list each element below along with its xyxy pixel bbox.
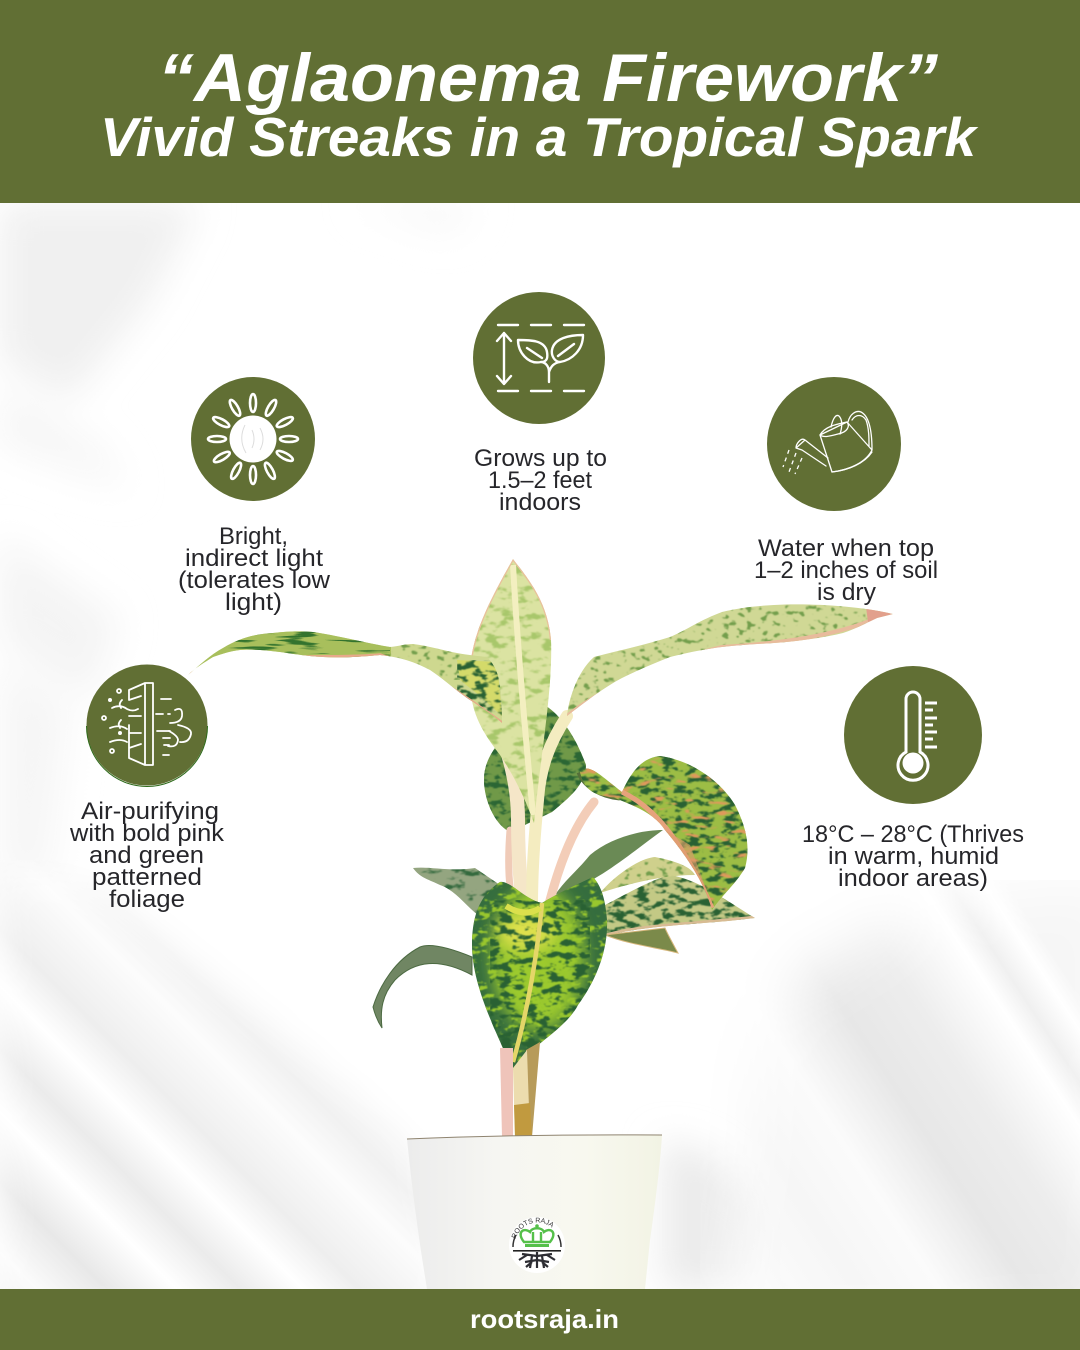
leaf: lower left drooping: [373, 946, 472, 1028]
text: air purifying: [69, 798, 225, 913]
icon: sun: [191, 377, 315, 501]
header band: [0, 0, 1080, 203]
icon: air purifier: [86, 664, 208, 786]
text: light: (tolerates low: [178, 567, 331, 594]
text: light: [178, 523, 331, 616]
icon: watering can: [767, 377, 901, 511]
text: water: is dry: [817, 579, 876, 606]
text: temperature: [802, 821, 1024, 892]
leaf: long right: [567, 604, 893, 716]
text: air purifying: Air-purifying: [81, 798, 219, 825]
text: height: 1.5–2 feet: [488, 467, 592, 494]
text: air purifying: foliage: [109, 886, 185, 913]
leaf: right mottled orange green: [580, 756, 748, 910]
stems: lower stalks: [500, 1042, 540, 1137]
footer website: rootsraja.in: [470, 1304, 619, 1334]
leaf: main front bright green: [468, 872, 610, 1072]
text: light: Bright,: [219, 523, 288, 550]
title line 2: Vivid Streaks in a Tropical Spark: [100, 106, 978, 168]
text: height: indoors: [499, 489, 581, 516]
leaf: top centre pale: [472, 559, 552, 823]
leaf: thin middle: [555, 830, 663, 895]
leaf: back right upper: [602, 857, 695, 892]
text: height: Grows up to: [474, 445, 607, 472]
text: temperature: in warm, humid: [828, 843, 999, 870]
icon: plant height: [473, 292, 605, 424]
icon: thermometer: [844, 666, 982, 804]
title line 1: “Aglaonema Firework”: [158, 40, 938, 116]
text: temperature: indoor areas): [838, 865, 988, 892]
leaf: thin left: [413, 868, 498, 914]
text: light: indirect light: [185, 545, 323, 572]
text: air purifying: patterned: [92, 864, 202, 891]
leaf: dark back centre: [484, 707, 586, 830]
pot: white planter: [407, 1135, 662, 1289]
text: light: light): [225, 589, 282, 616]
logo: roots raja sticker: ROOTS RAJA: [511, 1218, 554, 1238]
text: water: [754, 535, 938, 606]
leaf: back right lower: [605, 876, 755, 934]
text: air purifying: with bold pink: [69, 820, 225, 847]
stems: upper petioles: [498, 716, 594, 908]
text: water: 1–2 inches of soil: [754, 557, 938, 584]
logo: roots raja sticker: [509, 1217, 565, 1273]
text: temperature: 18°C – 28°C (Thrives: [802, 821, 1024, 848]
leaf: long left: [186, 628, 506, 726]
stem: right mottled leaf petiole: [580, 772, 620, 797]
text: water: Water when top: [758, 535, 934, 562]
text: air purifying: and green: [89, 842, 204, 869]
leaf: back right underside: [605, 928, 678, 953]
plant: aglaonema firework with pot: [188, 559, 929, 1289]
footer band: [0, 1289, 1080, 1350]
text: height: [474, 445, 607, 516]
